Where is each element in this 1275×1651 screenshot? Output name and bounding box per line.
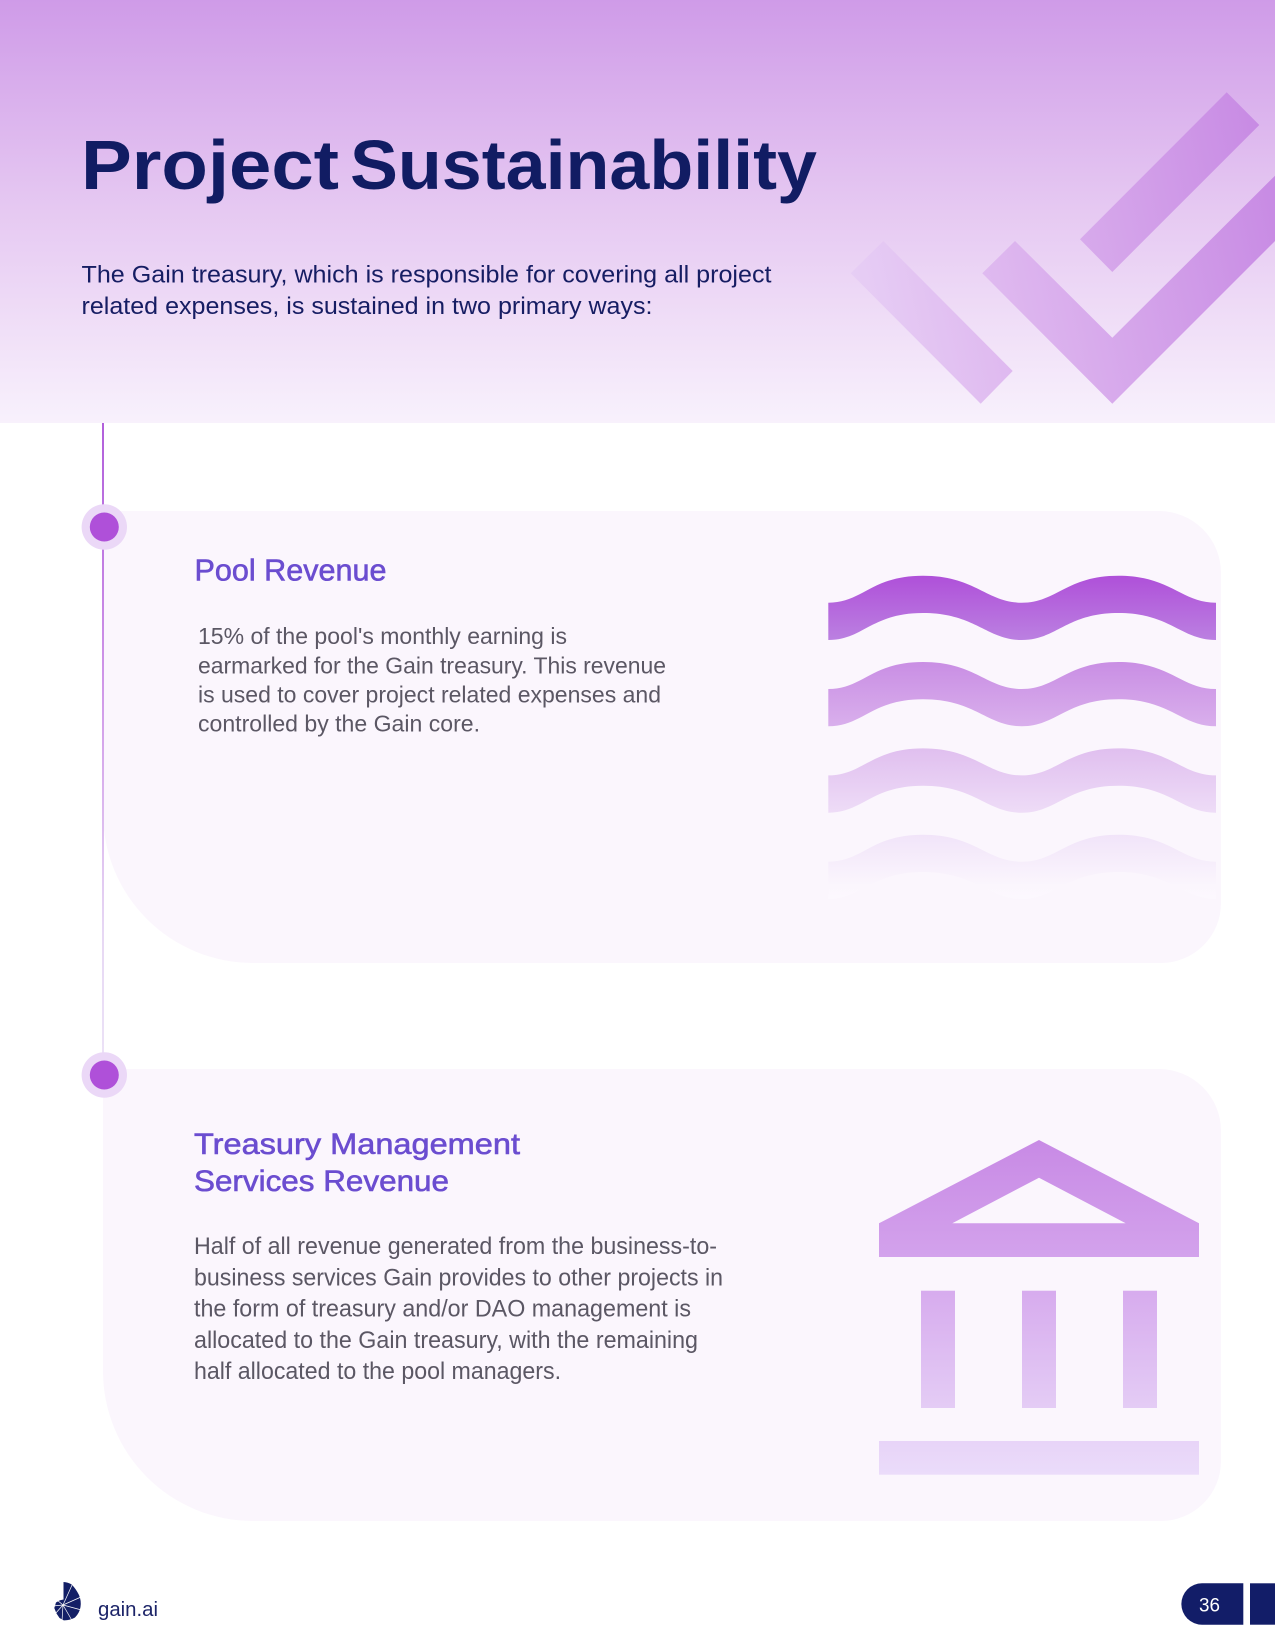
- header band: [0, 0, 1275, 423]
- title: [81, 126, 817, 204]
- icon: waves: [828, 576, 1216, 899]
- title: Project: [81, 126, 339, 204]
- timeline line: [102, 423, 104, 1063]
- body text: pool revenue: earmarked for the Gain treasury. This revenue: [198, 652, 666, 678]
- footer logo: [53, 1582, 82, 1621]
- intro text: related expenses, is sustained in two primary ways:: [82, 293, 652, 320]
- intro text: The Gain treasury, which is responsible for covering all project: [82, 262, 772, 289]
- body text: treasury management: business services Gain provides to other projects in: [194, 1265, 723, 1292]
- timeline dot one: [82, 504, 127, 550]
- body text: treasury management: [194, 1233, 723, 1385]
- body text: treasury management: Half of all revenue generated from the business-to-: [194, 1233, 717, 1260]
- body text: pool revenue: 15% of the pool's monthly earning is: [198, 623, 567, 649]
- heading: treasury management: Services Revenue: [194, 1165, 449, 1198]
- heading: pool revenue: Pool Revenue: [194, 553, 386, 588]
- panel: treasury management services revenue: [103, 1069, 1221, 1521]
- body text: treasury management: allocated to the Gain treasury, with the remaining: [194, 1327, 698, 1354]
- body text: treasury management: half allocated to the pool managers.: [194, 1358, 561, 1385]
- heading: treasury management: [194, 1128, 521, 1198]
- timeline dot two: [82, 1052, 127, 1098]
- icon: double checkmark: [851, 92, 1275, 404]
- intro text: [82, 262, 772, 320]
- page number badge: [1181, 1583, 1275, 1625]
- page number badge: 36: [1199, 1595, 1220, 1617]
- footer brand name: gain.ai: [98, 1598, 158, 1621]
- body text: pool revenue: [198, 623, 666, 736]
- body text: pool revenue: is used to cover project related expenses and: [198, 682, 661, 708]
- body text: treasury management: the form of treasury and/or DAO management is: [194, 1296, 691, 1323]
- body text: pool revenue: controlled by the Gain core.: [198, 710, 480, 736]
- panel: pool revenue: [103, 511, 1221, 963]
- title: Sustainability: [350, 126, 817, 204]
- icon: bank building: [879, 1140, 1199, 1475]
- heading: treasury management: Treasury Management: [194, 1128, 521, 1161]
